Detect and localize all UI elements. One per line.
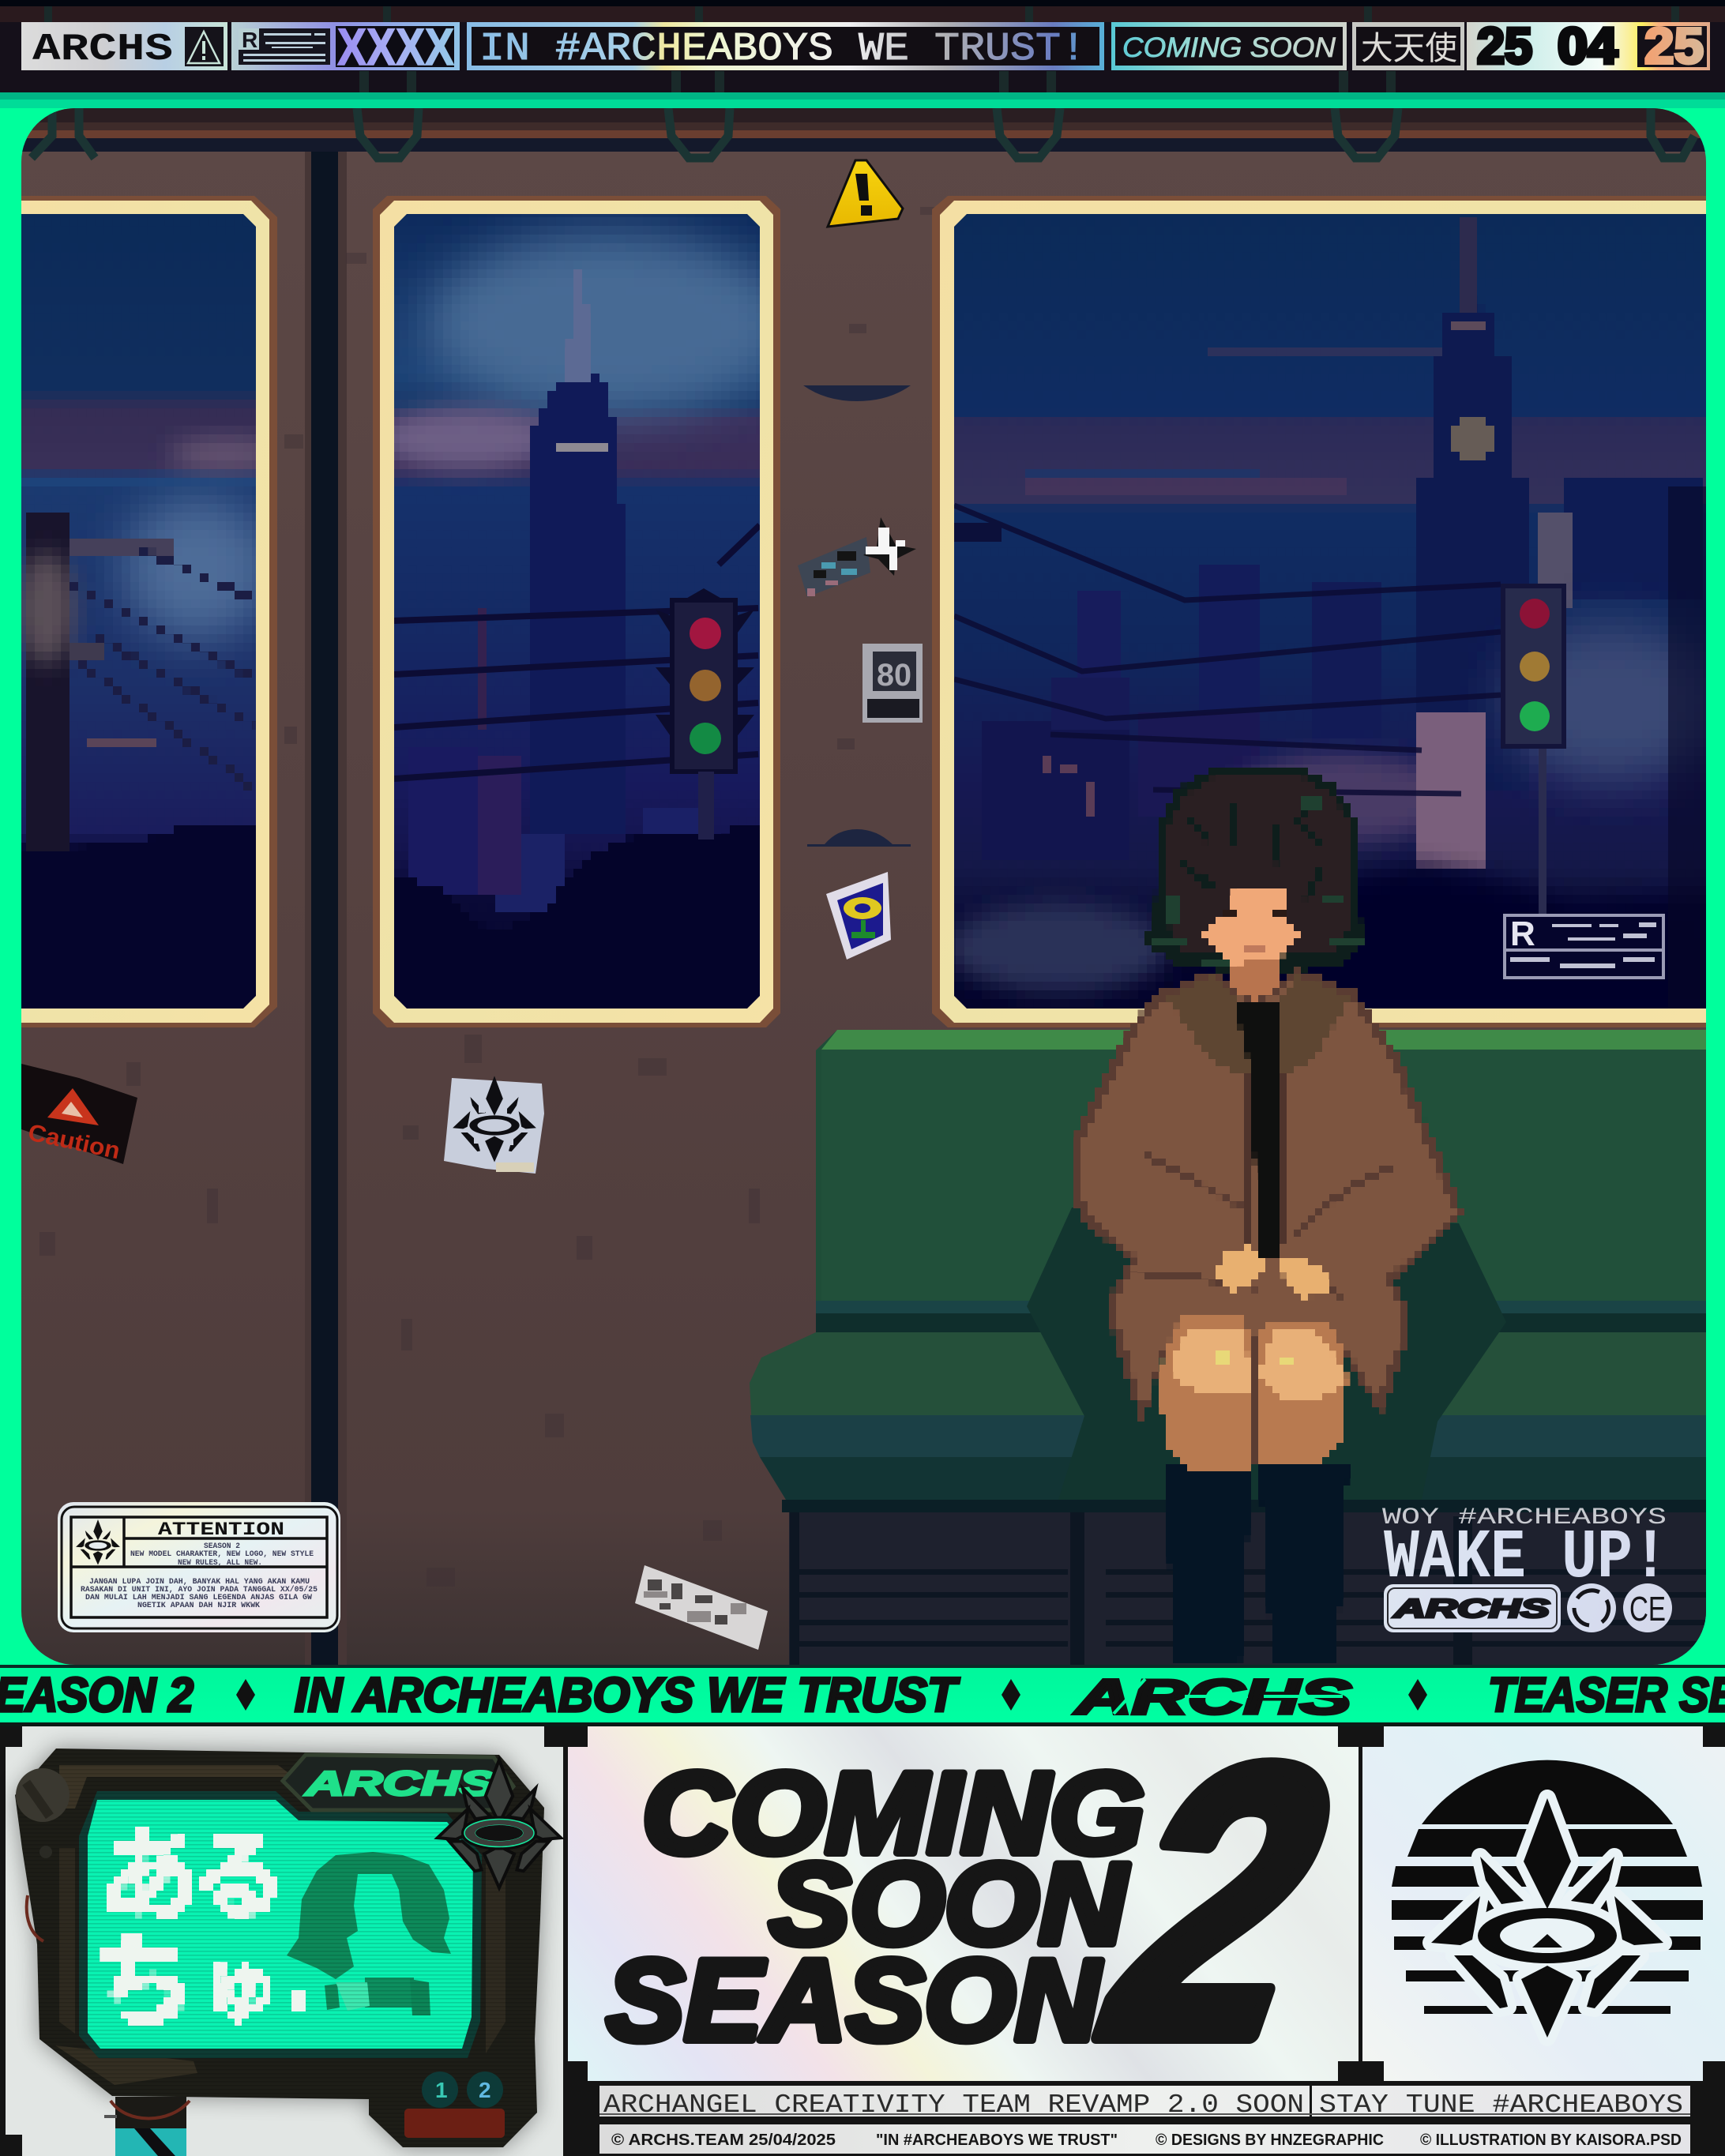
strip: revamp tagline: ARCHANGEL CREATIVITY TEAM REVAMP 2.0 SOON (603, 2090, 1304, 2120)
sticker: torn ticket (635, 1565, 768, 1650)
character: girl in brown coat (1072, 768, 1464, 1665)
wall (21, 108, 1706, 1665)
sticker: black caution (21, 1064, 137, 1164)
buttons (404, 2071, 505, 2138)
hanging straps (32, 108, 1694, 158)
label: date (1467, 17, 1710, 74)
ticker band: IN ARCHEABOYS WE TRUST (295, 1668, 960, 1722)
card: attention notice: NEW MODEL CHARAKTER, NEW LOGO, NEW STYLE (130, 1550, 314, 1559)
sticker: emblem (444, 1076, 544, 1174)
coat (1072, 967, 1464, 1428)
icon: stand with cable (104, 2097, 190, 2156)
ticker band (0, 1668, 1725, 1726)
block: wake up badge: WOY #ARCHEABOYS (1382, 1504, 1667, 1531)
title (607, 1748, 1144, 2064)
label: ARCHS warning: ARCHS (32, 28, 173, 71)
block: wake up badge: ARCHS (1392, 1594, 1550, 1623)
sticker: black caution: Caution (26, 1120, 122, 1164)
panel: monitor (6, 1726, 563, 2156)
strip: credits (599, 2124, 1690, 2154)
icon: star eye emblem (1431, 1798, 1663, 2038)
text: kana: ち (93, 1925, 196, 2041)
title: SEASON (607, 1936, 1102, 2064)
panel: logo (1362, 1726, 1725, 2081)
ticker band: ARCHS (1073, 1670, 1351, 1725)
sleeve folds (1129, 1155, 1396, 1295)
text: kana: あ (98, 1820, 201, 1935)
label: rating and XXXX: R (242, 28, 257, 52)
block: wake up badge (1382, 1504, 1672, 1632)
panel: train interior scene (0, 108, 1725, 1665)
title: SOON (769, 1839, 1129, 1968)
card: attention notice: SEASON 2 (204, 1542, 240, 1551)
window: middle (371, 196, 790, 1027)
badge: logo: ARCHS (304, 1764, 495, 1803)
card: attention notice: JANGAN LUPA JOIN DAH, BANYAK HAL YANG AKAN KAMU (89, 1578, 310, 1587)
sticker: sunflower (826, 872, 891, 960)
door pole (305, 152, 347, 1665)
rating sticker in window (1505, 915, 1663, 978)
face (1202, 886, 1300, 964)
label: ARCHS warning (21, 22, 227, 71)
label: rating and XXXX (231, 17, 460, 76)
label: date: 25 (1644, 17, 1704, 74)
top bar background (0, 0, 1725, 96)
knob (16, 1768, 70, 1941)
screen (88, 1800, 473, 2049)
card: attention notice: NEW RULES, ALL NEW. (178, 1559, 262, 1568)
sticker: 80 (862, 644, 923, 723)
sticker: 80: 80 (877, 658, 911, 693)
knees (1161, 1315, 1252, 1471)
window: right (932, 196, 1725, 1027)
card: attention notice: NGETIK APAAN DAH NJIR WKWK (137, 1602, 260, 1610)
traffic light (656, 588, 754, 839)
label: rating and XXXX: XXXX (337, 17, 454, 76)
green frame (0, 92, 1725, 1668)
icon: striped sun (1392, 1760, 1703, 2014)
text: kana: る (190, 1822, 288, 1931)
icon: emblem on monitor (441, 1764, 558, 1884)
legs (1163, 1461, 1252, 1665)
traffic light right (1503, 586, 1564, 914)
collars (1165, 975, 1252, 1082)
hair (1141, 768, 1370, 971)
power lines (394, 525, 760, 779)
text: kana: ゅ (197, 1938, 283, 2034)
strip: credits: © ILLUSTRATION BY KAISORA.PSD (1420, 2132, 1682, 2149)
panel: coming soon season 2 (568, 1687, 1385, 2117)
neck (1230, 962, 1280, 1001)
title: COMING (642, 1748, 1144, 1877)
rule under scene (0, 1665, 1725, 1668)
sticker: holographic star (798, 517, 916, 597)
strip: credits: "IN #ARCHEABOYS WE TRUST" (876, 2132, 1118, 2149)
block: wake up badge: WAKE UP! (1384, 1519, 1668, 1598)
rating sticker in window: R (1510, 915, 1535, 953)
strip: revamp tagline: STAY TUNE #ARCHEABOYS (1319, 2090, 1683, 2120)
strip: credits: © DESIGNS BY HNZEGRAPHIC (1156, 2132, 1384, 2149)
shirt (1235, 999, 1280, 1260)
label: coming soon (1111, 22, 1347, 70)
ticker band: EASON 2 (0, 1668, 194, 1722)
buttons: 1 (435, 2078, 448, 2102)
label: coming soon: COMING SOON (1122, 32, 1336, 63)
label: kanji: 大天使 (1361, 30, 1457, 66)
strip: credits: © ARCHS.TEAM 25/04/2025 (611, 2132, 836, 2149)
text: kana (93, 1820, 302, 2041)
handle marks (803, 385, 911, 847)
illustration: character on screen (287, 1852, 451, 2015)
seat bench (750, 1030, 1706, 1665)
label: date: 04 (1558, 17, 1618, 74)
label: in archeaboys we trust: IN #ARCHEABOYS WE TRUST! (479, 27, 1086, 72)
card: attention notice: DAN MULAI LAH MENJADI SANG LEGENDA ANJAS GILA GW (85, 1594, 312, 1602)
card: attention notice (58, 1502, 340, 1632)
hands (1217, 1245, 1265, 1292)
card: attention notice: ATTENTION (158, 1519, 284, 1540)
label: kanji (1352, 22, 1464, 70)
ceiling rail (21, 108, 1706, 152)
badge: logo (283, 1755, 513, 1810)
buttons: 2 (479, 2078, 491, 2102)
card: attention notice: RASAKAN DI UNIT INI, AYO JOIN PADA TANGGAL XX/05/25 (81, 1585, 318, 1594)
label: date: 25 (1477, 17, 1532, 74)
numeral 2: 2 (1059, 1687, 1385, 2117)
window: left (0, 196, 284, 1027)
wall marks (39, 207, 934, 1417)
sticker: warning triangle (828, 160, 903, 227)
strip: revamp tagline (599, 2086, 1690, 2120)
bottom background (0, 1726, 1725, 2156)
scanlines (15, 1748, 544, 2147)
block: wake up badge: CE (1629, 1590, 1666, 1628)
power lines right (954, 505, 1501, 794)
